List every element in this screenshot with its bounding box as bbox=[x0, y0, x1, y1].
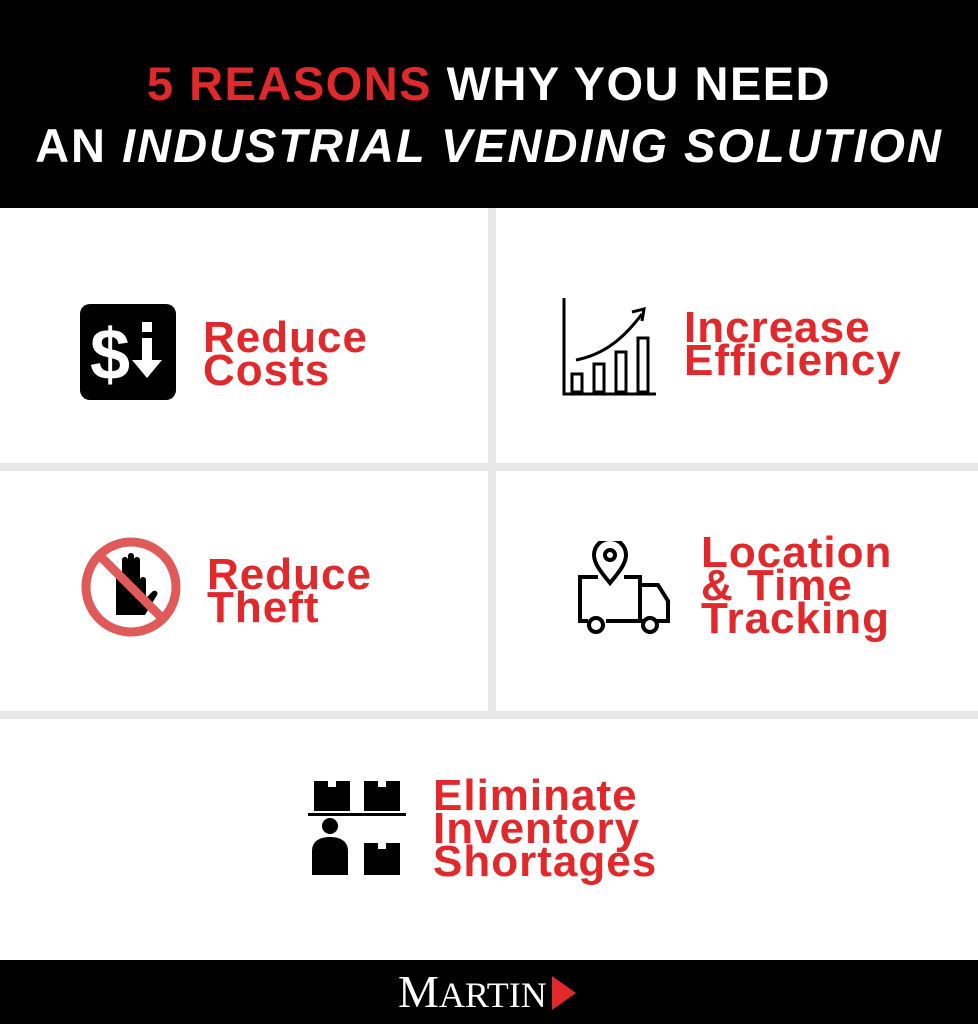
text: reduce theft bbox=[207, 550, 372, 632]
icon: dollar down bbox=[80, 304, 176, 400]
text: increase efficiency bbox=[684, 303, 902, 385]
text: reduce costs bbox=[203, 313, 368, 395]
panel: eliminate shortages bbox=[0, 719, 978, 960]
text: reduce costs: Costs bbox=[203, 346, 330, 395]
text: reduce theft: Reduce bbox=[207, 550, 372, 599]
panel: reduce theft bbox=[0, 471, 488, 711]
footer bbox=[0, 960, 978, 1024]
text: eliminate shortages: Shortages bbox=[433, 837, 657, 886]
text: location tracking: Tracking bbox=[701, 594, 890, 643]
title line 1: 5 REASONS WHY YOU NEED bbox=[147, 57, 831, 110]
icon: worker with boxes bbox=[308, 781, 406, 875]
text: eliminate shortages: Inventory bbox=[433, 804, 640, 853]
text: location tracking: & Time bbox=[701, 561, 853, 610]
text: location tracking bbox=[701, 528, 892, 643]
header bbox=[0, 0, 978, 208]
icon: growth chart bbox=[562, 298, 656, 396]
text: location tracking: Location bbox=[701, 528, 892, 577]
text: increase efficiency: Efficiency bbox=[684, 336, 902, 385]
text: eliminate shortages bbox=[433, 771, 657, 886]
text: reduce costs: Reduce bbox=[203, 313, 368, 362]
text: reduce theft: Theft bbox=[207, 583, 320, 632]
title line 2: AN INDUSTRIAL VENDING SOLUTION bbox=[35, 119, 943, 172]
icon: no hand bbox=[82, 538, 180, 636]
panel: reduce costs bbox=[0, 208, 488, 463]
icon: dollar down: $ bbox=[90, 315, 130, 395]
panel: location tracking bbox=[496, 471, 978, 711]
icon: delivery truck with pin bbox=[578, 541, 670, 634]
text: increase efficiency: Increase bbox=[684, 303, 871, 352]
logo: martin: MARTIN bbox=[398, 966, 547, 1017]
text: eliminate shortages: Eliminate bbox=[433, 771, 638, 820]
panel: increase efficiency bbox=[496, 208, 978, 463]
